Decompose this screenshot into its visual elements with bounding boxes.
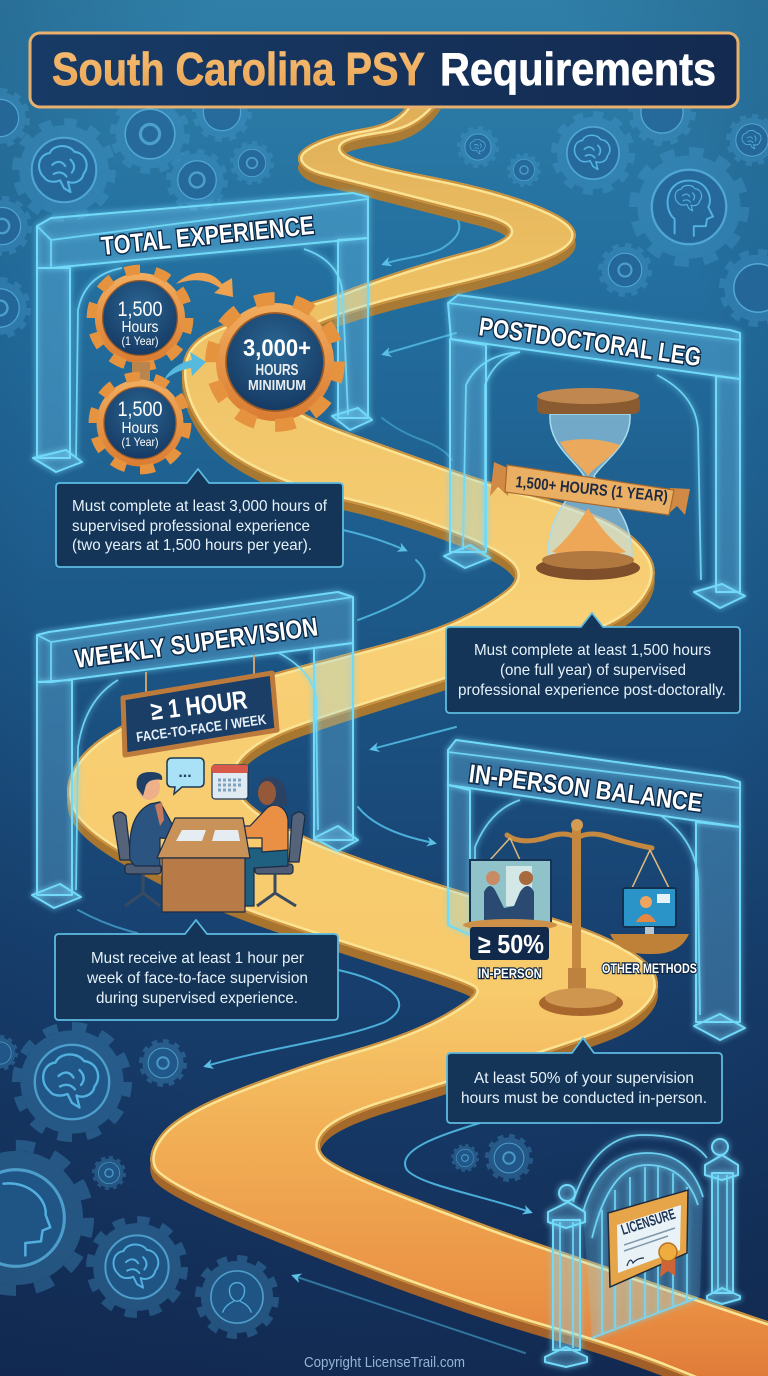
seal <box>659 1243 677 1277</box>
gear: far right top <box>728 116 768 164</box>
arch heading: WEEKLY SUPERVISION <box>73 611 320 674</box>
gear: first 1,500 hours: (1 Year) <box>122 334 159 348</box>
orange arrow <box>176 273 233 297</box>
gear: second 1,500 hours: 1,500 <box>118 398 162 421</box>
callout: total experience: supervised professional experience <box>72 518 310 535</box>
gear: second 1,500 hours: (1 Year) <box>122 435 159 449</box>
flow arrows <box>78 200 530 1353</box>
gear: brain right <box>554 114 632 192</box>
gear: brain bottom left <box>16 1026 128 1138</box>
arch heading: IN-PERSON BALANCE <box>467 758 704 818</box>
scale <box>490 819 669 1016</box>
callout: total experience <box>56 469 343 567</box>
callout: weekly supervision: during supervised experience. <box>96 990 298 1007</box>
panel: weekly supervision <box>32 592 358 1020</box>
glass arch <box>32 592 358 908</box>
gear: first 1,500 hours <box>92 270 188 366</box>
calendar <box>212 765 248 799</box>
licensure gate <box>545 1135 740 1367</box>
callout: in-person balance <box>447 1038 722 1123</box>
gear: brain large left <box>16 122 112 218</box>
gear: first 1,500 hours: 1,500 <box>118 298 162 321</box>
glass arch <box>444 295 745 608</box>
background gears: top <box>0 80 768 337</box>
right pan: video call <box>610 888 689 954</box>
certificate <box>608 1190 688 1287</box>
gate structure <box>545 1135 740 1367</box>
speech bubble: ... <box>178 764 192 781</box>
callout: postdoctoral leg <box>446 613 740 713</box>
glass arch <box>448 740 745 1040</box>
man <box>130 772 190 866</box>
gear: first 1,500 hours: Hours <box>122 319 158 336</box>
gear: head bottom left <box>0 1145 89 1291</box>
gear: 3,000+ hours minimum: MINIMUM <box>248 377 306 394</box>
callout: postdoctoral leg: professional experience post-doctorally. <box>458 682 726 699</box>
arch heading: TOTAL EXPERIENCE <box>100 210 316 261</box>
label: other methods: OTHER METHODS <box>602 960 697 976</box>
percent badge: ≥ 50% <box>478 929 544 959</box>
gear: left edge upper <box>0 90 28 146</box>
title text: white part: Requirements <box>440 43 716 95</box>
callout: in-person balance: hours must be conducted in-person. <box>461 1090 707 1107</box>
arch heading: POSTDOCTORAL LEG <box>477 311 703 372</box>
gear: 3,000+ hours minimum: 3,000+ <box>243 335 311 362</box>
gear: behind title left <box>194 84 250 140</box>
panel: postdoctoral leg <box>444 295 745 713</box>
gear: 3,000+ hours minimum <box>212 299 338 425</box>
gear: tiny near gate <box>452 1145 478 1171</box>
label: in-person: IN-PERSON <box>478 965 542 981</box>
gear: person bottom <box>198 1258 276 1336</box>
ribbon: 1,500+ hours: 1,500+ HOURS (1 YEAR) <box>515 474 669 506</box>
glass arch <box>33 193 372 472</box>
gear: tiny right <box>508 154 540 186</box>
left pan: in-person photo <box>463 860 557 931</box>
title banner <box>30 33 738 107</box>
footer copyright: Copyright LicenseTrail.com <box>304 1354 465 1371</box>
gear: behind title right <box>630 80 694 144</box>
gear: tiny bottom <box>93 1157 125 1189</box>
gear connector <box>132 362 150 380</box>
meeting scene <box>113 758 305 912</box>
gear: small person <box>232 143 272 183</box>
hanging sign: ≥ 1 HOUR <box>149 684 249 726</box>
gear: far right lower <box>722 252 768 324</box>
gear: head large right <box>633 151 745 263</box>
callout: postdoctoral leg: Must complete at least 1,500 hours <box>474 642 711 659</box>
gear: left edge middle <box>0 198 30 254</box>
speech bubble <box>167 758 204 794</box>
gear: 3,000+ hours minimum: HOURS <box>256 362 299 379</box>
gear: second 1,500 hours: Hours <box>122 420 158 437</box>
gear: small left <box>168 151 226 209</box>
callout: total experience: (two years at 1,500 hours per year). <box>72 537 312 554</box>
callout: postdoctoral leg: (one full year) of supervised <box>500 662 686 679</box>
hanging sign <box>123 655 277 755</box>
desk <box>157 818 250 912</box>
gear: brain bottom center <box>90 1220 184 1314</box>
gear: upper left <box>113 97 187 171</box>
signature <box>627 1258 644 1266</box>
panel: total experience <box>33 193 372 567</box>
gear: second 1,500 hours <box>93 376 187 470</box>
woman <box>230 777 288 906</box>
panel: in-person balance <box>447 740 745 1123</box>
callout: weekly supervision: Must receive at least 1 hour per <box>91 950 305 967</box>
right chair <box>255 812 305 906</box>
hanging sign: FACE-TO-FACE / WEEK <box>135 711 267 745</box>
gear: small near gate <box>487 1136 531 1180</box>
gear: small brain right <box>458 127 498 167</box>
gear: small upper bottom <box>141 1041 185 1085</box>
gear: left edge lower <box>0 279 29 337</box>
callout: in-person balance: At least 50% of your supervision <box>474 1070 694 1087</box>
callout: weekly supervision <box>55 920 338 1020</box>
title text: orange part: South Carolina PSY <box>52 43 425 95</box>
gear: edge small <box>0 1036 17 1070</box>
callout: total experience: Must complete at least 3,000 hours of <box>72 498 328 515</box>
gear: small lower right <box>600 245 650 295</box>
background gears: bottom <box>0 1026 531 1336</box>
left chair <box>113 812 161 906</box>
certificate: LICENSURE <box>619 1206 678 1239</box>
icon: hourglass <box>536 388 640 580</box>
blue arrow <box>164 352 206 380</box>
callout: weekly supervision: week of face-to-face supervision <box>86 970 308 987</box>
ribbon: 1,500+ hours <box>490 462 690 516</box>
